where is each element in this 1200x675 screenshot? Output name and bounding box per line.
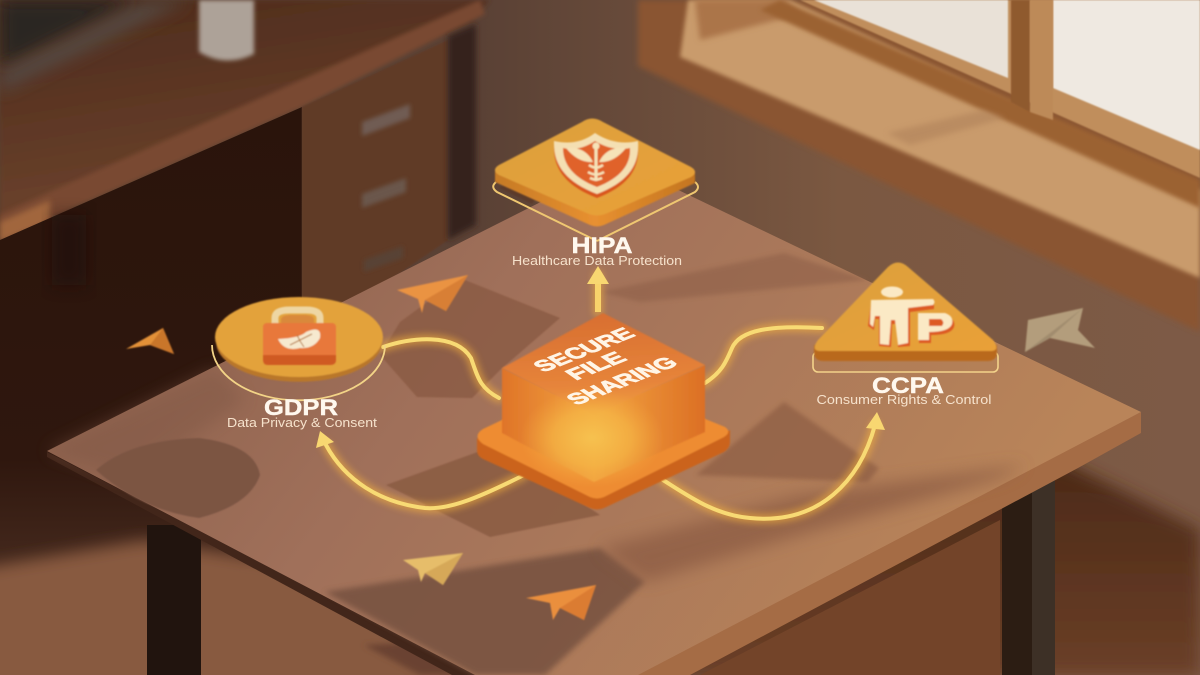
drawer handles	[362, 104, 410, 136]
arrowhead: GDPR	[316, 431, 334, 448]
GDPR subtitle: Data Privacy & Consent	[227, 415, 377, 430]
table shadows	[47, 253, 1025, 675]
triangle platform	[814, 262, 997, 361]
cube glow	[520, 388, 664, 488]
paper plane: bottom orange	[526, 585, 596, 620]
floor shadow at right	[640, 455, 1200, 675]
base plate	[477, 375, 730, 510]
glowing connector lines	[326, 275, 875, 519]
connector core: CCPA link	[705, 327, 822, 383]
table	[47, 162, 1141, 675]
arrowhead: HIPA	[587, 266, 609, 284]
cube label: FILE	[560, 348, 632, 383]
central cube: secure file sharing	[477, 313, 730, 510]
plant pot	[199, 0, 254, 61]
table legs	[147, 470, 1055, 675]
window and sill	[638, 0, 1200, 332]
connector core: GDPR link	[383, 339, 499, 398]
arrowhead: CCPA	[866, 412, 885, 430]
ring shadow	[499, 184, 536, 204]
GDPR heading: GDPR	[264, 395, 338, 420]
connector core: GDPR arrow	[326, 445, 524, 508]
cube label: SECURE	[527, 324, 640, 375]
node: HIPA	[493, 118, 698, 268]
floor under table, left	[0, 540, 490, 675]
paper plane: upper orange	[397, 275, 468, 313]
paper plane: left orange	[126, 328, 174, 354]
connector glow	[326, 275, 875, 519]
paper plane: right tan	[1025, 308, 1095, 352]
table top	[47, 162, 1141, 675]
icon: shield with caduceus	[554, 133, 638, 198]
node: CCPA	[813, 262, 998, 407]
diamond platform	[495, 118, 695, 226]
HIPA subtitle: Healthcare Data Protection	[512, 253, 682, 268]
disc platform	[215, 297, 383, 382]
node: GDPR	[212, 297, 385, 430]
table edge	[47, 452, 480, 675]
connector core: CCPA arrow	[663, 425, 875, 519]
HIPA heading: HIPA	[572, 233, 633, 258]
ring outline	[493, 182, 698, 241]
cube front faces	[502, 365, 705, 482]
CCPA subtitle: Consumer Rights & Control	[816, 392, 992, 407]
CCPA heading: CCPA	[872, 373, 944, 398]
cube top	[502, 313, 705, 415]
icon: padlock with leaf	[263, 310, 336, 365]
desk and drawers	[0, 0, 490, 610]
paper plane: bottom yellow	[403, 553, 463, 585]
icon: person with P sign	[868, 286, 954, 347]
ring outline	[813, 352, 998, 372]
cube label: SHARING	[560, 353, 683, 408]
connector core: HIPA link	[595, 278, 601, 312]
ring outline	[212, 345, 385, 400]
cube label	[527, 324, 683, 408]
